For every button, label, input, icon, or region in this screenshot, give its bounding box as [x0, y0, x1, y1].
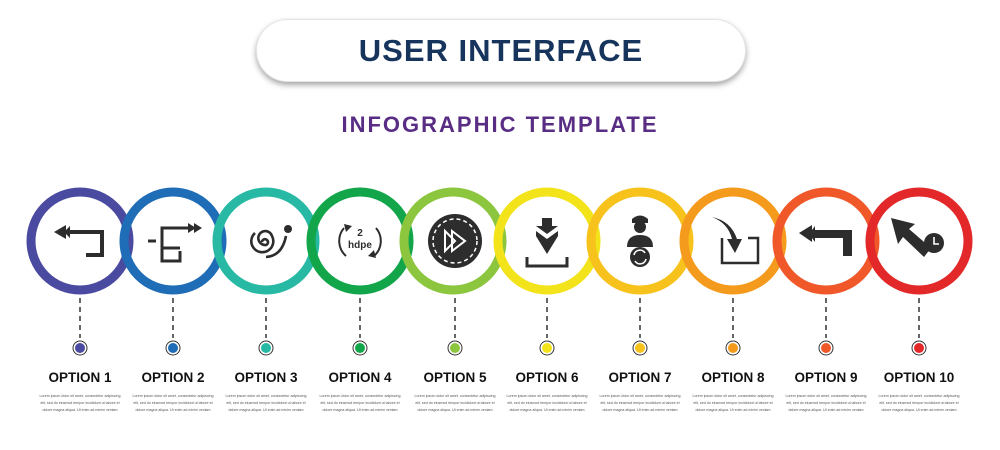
option 3: OPTION 3	[234, 370, 298, 385]
icon: worker	[627, 216, 653, 267]
option 4: 2	[357, 228, 363, 239]
option 10	[870, 192, 968, 412]
icon: inbox arrow	[722, 238, 758, 263]
option 5: Lorem ipsum dolor sit amet, consectetur adipiscing	[415, 394, 495, 398]
option 2: dolore magna aliqua. Ut enim ad minim veniam	[135, 408, 211, 412]
option 8: elit, sed do eiusmod tempor incididunt ut labore et	[693, 401, 773, 405]
option 2: OPTION 2	[141, 370, 205, 385]
option 9	[777, 192, 875, 412]
option 8: dolore magna aliqua. Ut enim ad minim veniam	[695, 408, 771, 412]
option 7: dolore magna aliqua. Ut enim ad minim veniam	[602, 408, 678, 412]
description: dolore magna aliqua. Ut enim ad minim veniam	[42, 408, 118, 412]
option 2: Lorem ipsum dolor sit amet, consectetur adipiscing	[133, 394, 213, 398]
option 3: Lorem ipsum dolor sit amet, consectetur adipiscing	[226, 394, 306, 398]
title: USER INTERFACE	[359, 33, 643, 68]
option 6: elit, sed do eiusmod tempor incididunt ut labore et	[507, 401, 587, 405]
option 3: dolore magna aliqua. Ut enim ad minim veniam	[228, 408, 304, 412]
icon: flip arrow	[148, 228, 190, 261]
option 4: dolore magna aliqua. Ut enim ad minim veniam	[322, 408, 398, 412]
icon: hdpe recycle	[339, 228, 381, 256]
option 3	[217, 192, 315, 412]
option 9: dolore magna aliqua. Ut enim ad minim veniam	[788, 408, 864, 412]
icon: download	[536, 218, 558, 254]
icon: fast forward disc	[428, 214, 482, 268]
option 10: Lorem ipsum dolor sit amet, consectetur adipiscing	[879, 394, 959, 398]
icon: turn left arrow	[799, 225, 852, 256]
option 7	[591, 192, 689, 412]
option 3: elit, sed do eiusmod tempor incididunt ut labore et	[226, 401, 306, 405]
option 7: Lorem ipsum dolor sit amet, consectetur adipiscing	[600, 394, 680, 398]
label: OPTION 1	[48, 370, 112, 385]
option 6: OPTION 6	[515, 370, 579, 385]
option 5: OPTION 5	[423, 370, 487, 385]
option 10: dolore magna aliqua. Ut enim ad minim veniam	[881, 408, 957, 412]
option 2: elit, sed do eiusmod tempor incididunt ut labore et	[133, 401, 213, 405]
description: Lorem ipsum dolor sit amet, consectetur adipiscing	[40, 394, 120, 398]
option 5: elit, sed do eiusmod tempor incididunt ut labore et	[415, 401, 495, 405]
option 6: dolore magna aliqua. Ut enim ad minim veniam	[509, 408, 585, 412]
option 10: OPTION 10	[884, 370, 954, 385]
option 5	[404, 192, 502, 412]
option 1	[31, 192, 129, 412]
title pill	[256, 19, 746, 82]
option 2	[124, 192, 222, 412]
option 4: elit, sed do eiusmod tempor incididunt ut labore et	[320, 401, 400, 405]
subtitle: INFOGRAPHIC TEMPLATE	[341, 112, 659, 137]
option 4: Lorem ipsum dolor sit amet, consectetur adipiscing	[320, 394, 400, 398]
option 6	[498, 192, 596, 412]
option 8: Lorem ipsum dolor sit amet, consectetur adipiscing	[693, 394, 773, 398]
icon: spiral	[251, 231, 286, 257]
option 5: dolore magna aliqua. Ut enim ad minim veniam	[417, 408, 493, 412]
option 4	[311, 192, 409, 412]
description: elit, sed do eiusmod tempor incididunt ut labore et	[40, 401, 120, 405]
option 7: OPTION 7	[608, 370, 672, 385]
description	[40, 394, 120, 412]
option 9: elit, sed do eiusmod tempor incididunt ut labore et	[786, 401, 866, 405]
option 8: OPTION 8	[701, 370, 765, 385]
icon: return arrow	[54, 225, 104, 257]
option 9: OPTION 9	[794, 370, 858, 385]
option 9: Lorem ipsum dolor sit amet, consectetur adipiscing	[786, 394, 866, 398]
option 6: Lorem ipsum dolor sit amet, consectetur adipiscing	[507, 394, 587, 398]
option 4: OPTION 4	[328, 370, 392, 385]
icon: cursor clock	[891, 218, 931, 257]
option 10: elit, sed do eiusmod tempor incididunt ut labore et	[879, 401, 959, 405]
option 7: elit, sed do eiusmod tempor incididunt ut labore et	[600, 401, 680, 405]
option 4: hdpe	[348, 240, 372, 251]
option 8	[684, 192, 782, 412]
